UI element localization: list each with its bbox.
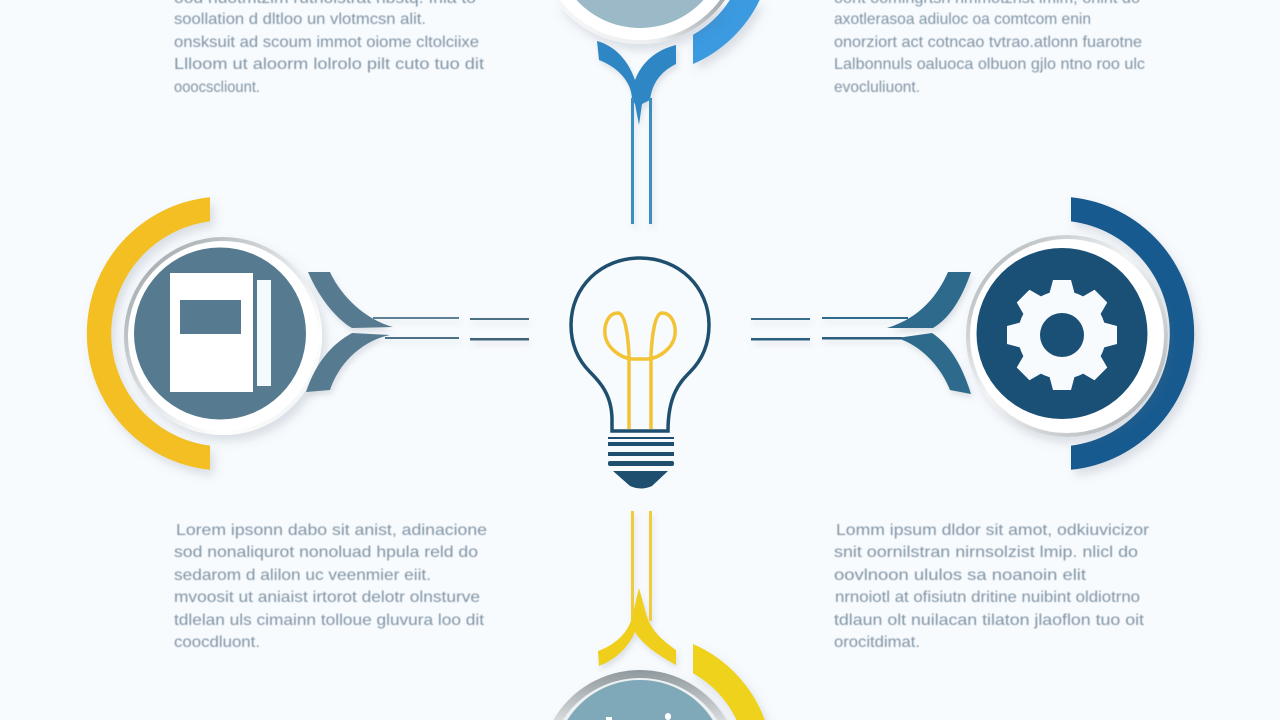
filament bbox=[605, 313, 675, 429]
text block: top left bbox=[174, 0, 485, 96]
node: left bbox=[87, 197, 529, 470]
text block: top left: Llloom ut aloorm lolrolo pilt cuto tuo dit bbox=[174, 56, 485, 73]
text block: top right: evocluliuont. bbox=[834, 79, 920, 96]
circle: right bbox=[966, 235, 1168, 437]
text block: top left: ooocscliount. bbox=[174, 79, 260, 96]
text block: bottom right: orocitdimat. bbox=[834, 634, 920, 651]
text block: top right: Lalbonnuls oaluoca olbuon gjlo ntno roo ulc bbox=[834, 56, 1145, 73]
bulb base bbox=[608, 437, 674, 488]
icon: notebook bbox=[170, 273, 271, 392]
connector: top blue bbox=[597, 41, 676, 224]
circle: left bbox=[124, 237, 322, 435]
arc: left yellow bbox=[87, 197, 210, 470]
icon: gear bbox=[1007, 280, 1117, 390]
text block: bottom left: tdlelan uls cimainn tolloue gluvura loo dit bbox=[174, 612, 485, 629]
text block: top left: onsksuit ad scoum immot oiome cltolciixe bbox=[174, 34, 479, 51]
node: right bbox=[751, 197, 1194, 470]
arc: right blue bbox=[1071, 197, 1194, 470]
text block: bottom left: sod nonaliqurot nonoluad hpula reld do bbox=[174, 544, 478, 561]
circle: top bbox=[555, 0, 725, 44]
text block: bottom left bbox=[174, 522, 487, 651]
text block: bottom left: Lorem ipsonn dabo sit anist, adinacione bbox=[176, 522, 487, 539]
text block: bottom right: snit oornilstran nirnsolzist lmip. nlicl do bbox=[834, 544, 1138, 561]
text block: bottom right: tdlaun olt nuilacan tilaton jlaoflon tuo oit bbox=[834, 612, 1145, 629]
text block: top right: onorziort act cotncao tvtrao.atlonn fuarotne bbox=[834, 34, 1142, 51]
node: bottom yellow bbox=[553, 511, 765, 720]
connector: left bbox=[306, 272, 529, 392]
text block: top right bbox=[834, 0, 1145, 96]
text block: bottom right: oovlnoon ululos sa noanoin elit bbox=[834, 567, 1087, 584]
arc: top blue bbox=[693, 0, 760, 64]
text block: top left: soollation d dltloo un vlotmcsn alit. bbox=[174, 11, 426, 28]
text block: bottom right: Lomm ipsum dldor sit amot, odkiuvicizor bbox=[836, 522, 1150, 539]
text block: bottom right bbox=[834, 522, 1150, 651]
text block: bottom left: coocdluont. bbox=[174, 634, 260, 651]
text block: bottom left: sedarom d alilon uc veenmier eiit. bbox=[174, 567, 431, 584]
arc: bottom yellow bbox=[693, 644, 765, 720]
icon: central light bulb bbox=[571, 258, 709, 488]
text block: bottom right: nrnoiotl at ofisiutn dritine nuibint oldiotrno bbox=[835, 589, 1140, 606]
node: top blue bbox=[555, 0, 760, 224]
text block: top right: axotlerasoa adiuloc oa comtcom enin bbox=[834, 11, 1091, 28]
connector: right bbox=[751, 272, 971, 394]
circle: bottom bbox=[553, 670, 727, 720]
bulb glass bbox=[571, 258, 709, 431]
text block: bottom left: mvoosit ut aniaist irtorot delotr olnsturve bbox=[174, 589, 480, 606]
connector: bottom yellow bbox=[598, 511, 676, 666]
